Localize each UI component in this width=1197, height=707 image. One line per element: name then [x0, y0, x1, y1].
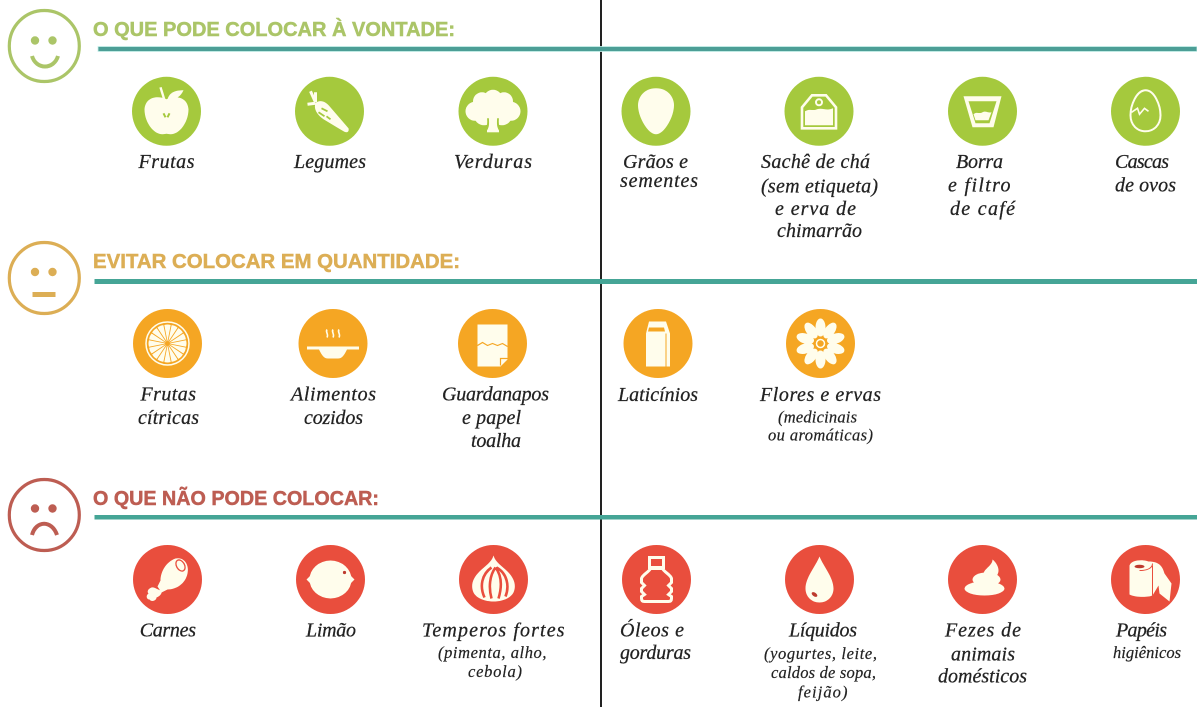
item: toilet paper — [1111, 545, 1181, 662]
item: flowers and herbs: Flores e ervas — [759, 384, 881, 406]
item: meat: Carnes — [140, 620, 196, 642]
item: pet waste — [938, 545, 1027, 688]
item: lemon — [296, 545, 365, 642]
item: oils and fats: Óleos e — [620, 618, 684, 642]
item: grains and seeds: sementes — [620, 170, 698, 192]
item: eggshells — [1111, 77, 1180, 196]
item: lemon: Limão — [305, 620, 356, 642]
item: cooked food — [289, 309, 376, 429]
item: strong seasonings: Temperos fortes — [422, 620, 565, 642]
item: liquids: Líquidos — [788, 620, 857, 642]
item: tea bags — [761, 77, 878, 242]
item: oils and fats: gorduras — [620, 642, 691, 664]
item: eggshells: de ovos — [1115, 174, 1176, 196]
item: citrus fruits: Frutas — [140, 384, 196, 406]
item: coffee grounds and filter — [948, 77, 1017, 220]
item: tea bags: e erva de — [775, 198, 856, 220]
item: coffee grounds and filter: e filtro — [948, 174, 1010, 196]
heading: orange section: EVITAR COLOCAR EM QUANTIDADE: — [93, 251, 460, 273]
item: pet waste: Fezes de — [944, 620, 1021, 642]
item: citrus fruits — [133, 309, 202, 429]
section rule — [94, 279, 1197, 284]
item: strong seasonings — [422, 545, 565, 681]
icon: sad face — [9, 480, 79, 550]
item: eggshells: Cascas — [1115, 151, 1169, 173]
item: dairy: Laticínios — [617, 384, 698, 406]
item: dairy — [617, 309, 698, 406]
item: pet waste: animais — [951, 644, 1015, 666]
item: napkins and paper towel: Guardanapos — [442, 384, 549, 406]
item: tea bags: chimarrão — [777, 220, 862, 242]
item: toilet paper: higiênicos — [1113, 643, 1181, 662]
icon: neutral face — [9, 242, 79, 314]
item: toilet paper: Papéis — [1115, 620, 1167, 642]
item: cooked food: cozidos — [304, 407, 363, 429]
item: fruits: Frutas — [138, 151, 195, 173]
icon: happy face — [9, 10, 79, 82]
item: oils and fats — [620, 545, 691, 664]
section rule — [98, 46, 1197, 52]
panel: avoid in quantity — [9, 242, 1197, 452]
item: grains and seeds: Grãos e — [623, 151, 688, 173]
section rule — [94, 515, 1197, 520]
item: liquids: caldos de sopa, — [771, 663, 876, 682]
item: liquids: feijão) — [798, 683, 848, 702]
item: coffee grounds and filter: Borra — [956, 151, 1003, 173]
item: flowers and herbs — [759, 309, 881, 445]
panel: what can be added freely — [9, 10, 1197, 242]
item: greens: Verduras — [454, 151, 532, 173]
item: napkins and paper towel: e papel — [462, 407, 521, 429]
item: grains and seeds — [620, 77, 698, 192]
item: meat — [133, 545, 202, 642]
item: strong seasonings: cebola) — [468, 662, 522, 681]
item: napkins and paper towel: toalha — [471, 430, 521, 452]
item: vegetables — [293, 77, 366, 173]
item: cooked food: Alimentos — [289, 384, 376, 406]
item: flowers and herbs: (medicinais — [778, 408, 857, 427]
panel: what must not be added — [9, 480, 1197, 702]
item: strong seasonings: (pimenta, alho, — [438, 643, 546, 662]
item: greens — [454, 77, 532, 173]
item: pet waste: domésticos — [938, 666, 1027, 688]
item: flowers and herbs: ou aromáticas) — [768, 426, 873, 445]
item: fruits — [132, 77, 201, 173]
heading: green section: O QUE PODE COLOCAR À VONTADE: — [93, 18, 455, 41]
item: liquids — [764, 545, 877, 702]
item: vegetables: Legumes — [293, 151, 366, 173]
item: tea bags: Sachê de chá — [761, 151, 870, 173]
item: liquids: (yogurtes, leite, — [764, 644, 877, 663]
item: coffee grounds and filter: de café — [950, 198, 1016, 220]
item: citrus fruits: cítricas — [138, 407, 199, 429]
item: tea bags: (sem etiqueta) — [761, 176, 878, 198]
heading: red section: O QUE NÃO PODE COLOCAR: — [93, 487, 379, 510]
item: napkins and paper towel — [442, 309, 549, 452]
